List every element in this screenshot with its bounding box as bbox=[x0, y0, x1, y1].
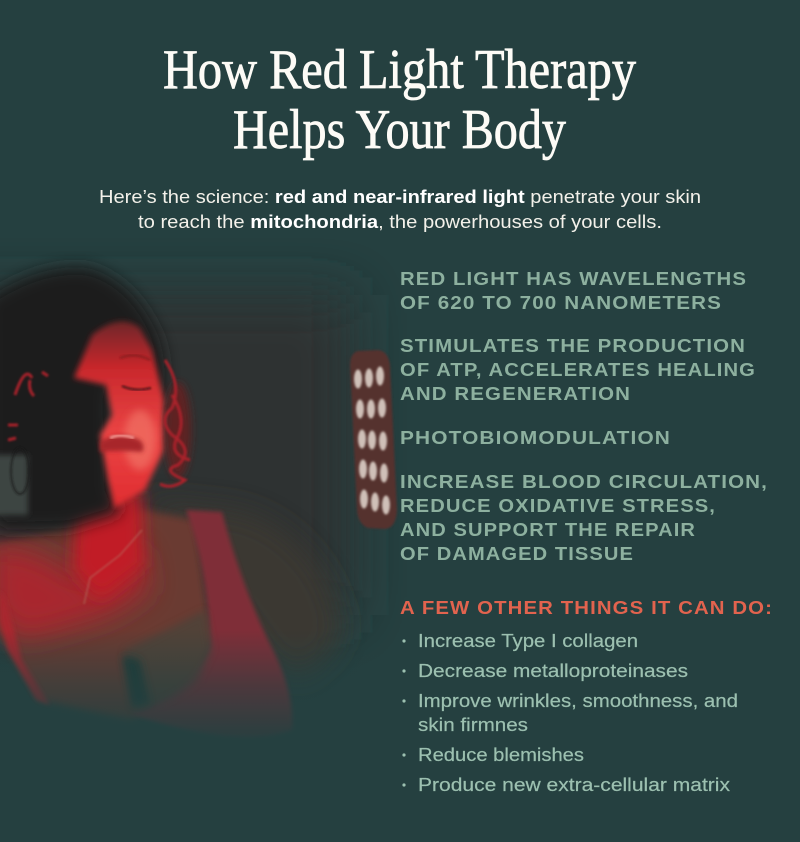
cleavage shadow bbox=[125, 610, 212, 710]
clothing strap bbox=[130, 510, 292, 737]
benefits list: Reduce blemishes bbox=[418, 744, 584, 765]
fact: circulation: INCREASE BLOOD CIRCULATION, bbox=[400, 471, 768, 492]
fact: wavelengths: OF 620 TO 700 NANOMETERS bbox=[400, 292, 722, 313]
title: How Red Light Therapy bbox=[163, 39, 636, 101]
LED panel bbox=[350, 350, 397, 529]
fact: circulation bbox=[400, 471, 768, 564]
lips bbox=[100, 435, 144, 452]
hoop earring bbox=[11, 448, 29, 494]
bottom fade bbox=[0, 630, 410, 765]
chest red glow bbox=[0, 545, 150, 640]
lit face bbox=[74, 321, 164, 508]
left side strap bbox=[0, 590, 50, 705]
benefits list: Improve wrinkles, smoothness, and bbox=[418, 690, 738, 711]
fact: ATP: OF ATP, ACCELERATES HEALING bbox=[400, 359, 756, 380]
fact: circulation: OF DAMAGED TISSUE bbox=[400, 543, 634, 564]
eye bbox=[122, 386, 151, 390]
subheading: A FEW OTHER THINGS IT CAN DO: bbox=[400, 597, 773, 618]
fact: ATP: STIMULATES THE PRODUCTION bbox=[400, 335, 746, 356]
neck glow bbox=[72, 490, 145, 600]
benefits list bbox=[402, 630, 738, 795]
necklace bbox=[84, 530, 142, 604]
benefits list: skin firmnes bbox=[418, 714, 528, 735]
cheek highlight bbox=[124, 410, 156, 470]
wall shading bbox=[0, 295, 350, 615]
benefits list: Increase Type I collagen bbox=[418, 630, 638, 651]
intro text bbox=[99, 187, 701, 232]
curls bbox=[165, 382, 191, 478]
intro text: Here’s the science: red and near-infrared light penetrate your skin bbox=[99, 187, 701, 207]
fact: wavelengths bbox=[400, 268, 747, 313]
fact: wavelengths: RED LIGHT HAS WAVELENGTHS bbox=[400, 268, 747, 289]
photo: woman under a red light panel bbox=[0, 267, 410, 765]
fact: circulation: REDUCE OXIDATIVE STRESS, bbox=[400, 495, 716, 516]
fact: ATP: AND REGENERATION bbox=[400, 383, 631, 404]
title: Helps Your Body bbox=[233, 99, 566, 161]
fact: photobiomodulation: PHOTOBIOMODULATION bbox=[400, 427, 671, 448]
benefits list: Decrease metalloproteinases bbox=[418, 660, 688, 681]
lighter wall patch bbox=[0, 455, 28, 515]
hair and shadowed face bbox=[0, 267, 165, 530]
torso skin bbox=[0, 510, 212, 720]
fact: circulation: AND SUPPORT THE REPAIR bbox=[400, 519, 696, 540]
arm and shoulder bbox=[145, 500, 340, 680]
intro text: to reach the mitochondria , the powerhouses of your cells. bbox=[138, 212, 662, 232]
title bbox=[163, 39, 636, 161]
fact: ATP bbox=[400, 335, 756, 404]
benefits list: Produce new extra-cellular matrix bbox=[418, 774, 731, 795]
